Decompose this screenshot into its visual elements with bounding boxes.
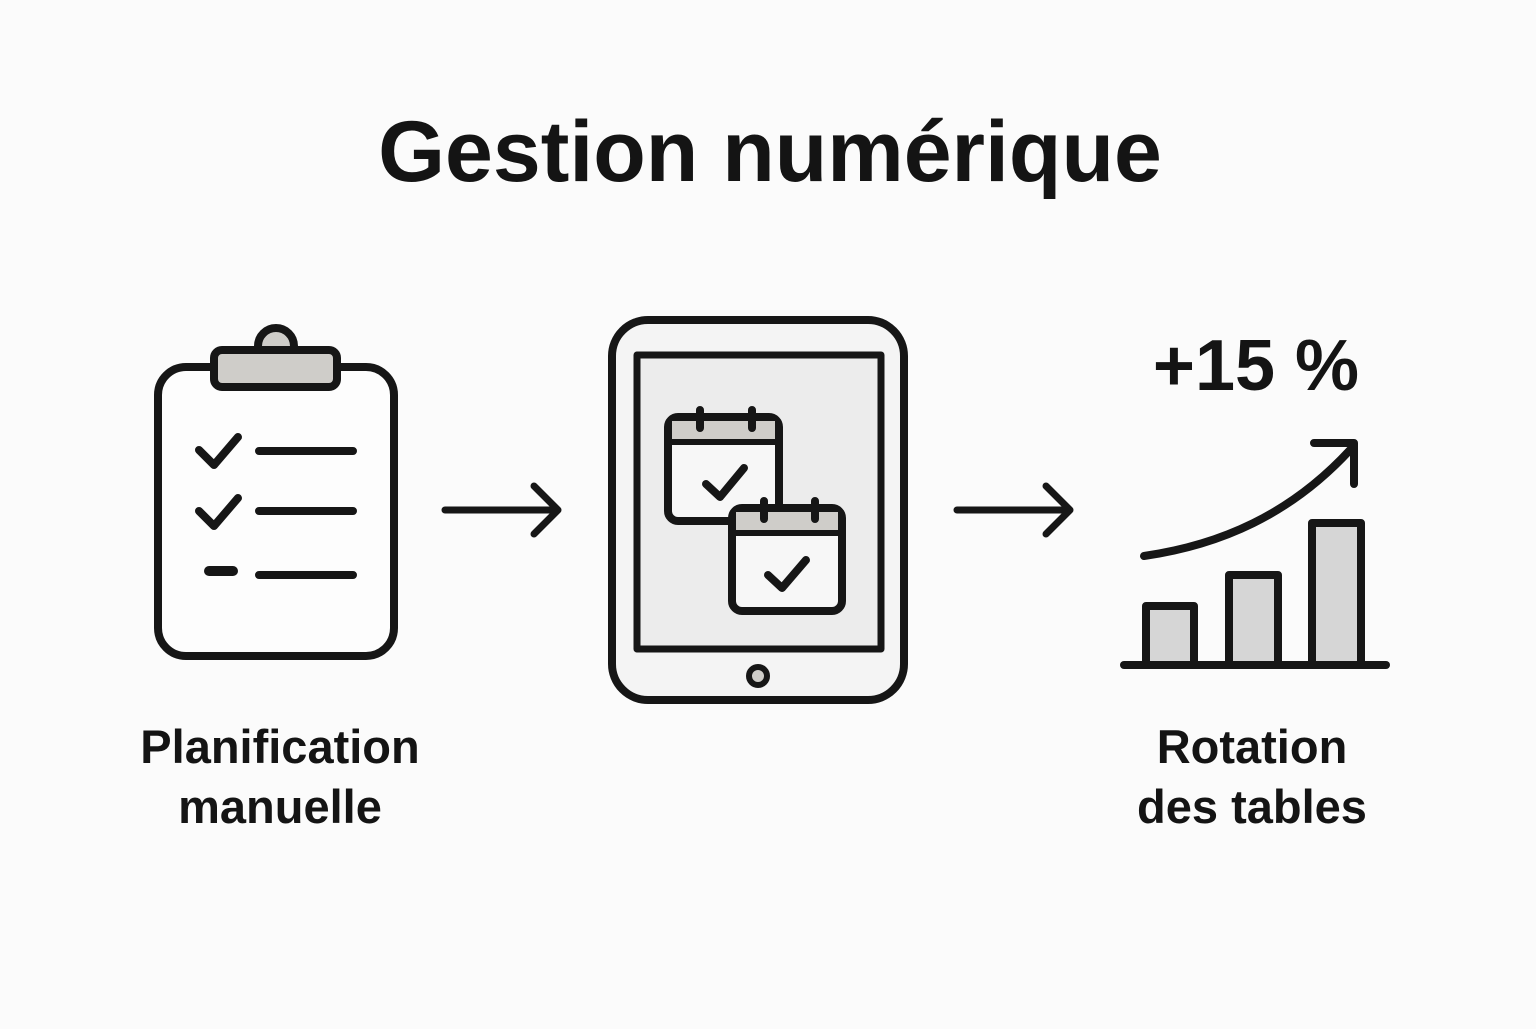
arrow 1	[445, 486, 558, 534]
label: rotation des tables: Rotation	[1157, 720, 1347, 773]
stat: +15 %: +15 %	[1153, 326, 1359, 406]
label: planification manuelle	[140, 720, 420, 833]
arrow 2	[957, 486, 1070, 534]
label: planification manuelle: Planification	[140, 720, 420, 773]
label: rotation des tables: des tables	[1137, 780, 1367, 833]
icon: growth bar chart	[1124, 443, 1386, 665]
calendar 1	[668, 410, 779, 521]
label: planification manuelle: manuelle	[178, 780, 382, 833]
calendar 2	[732, 501, 842, 611]
icon: tablet with calendars	[612, 320, 904, 700]
label: rotation des tables	[1137, 720, 1367, 833]
title: Gestion numérique	[378, 104, 1162, 200]
icon: clipboard	[158, 328, 394, 656]
